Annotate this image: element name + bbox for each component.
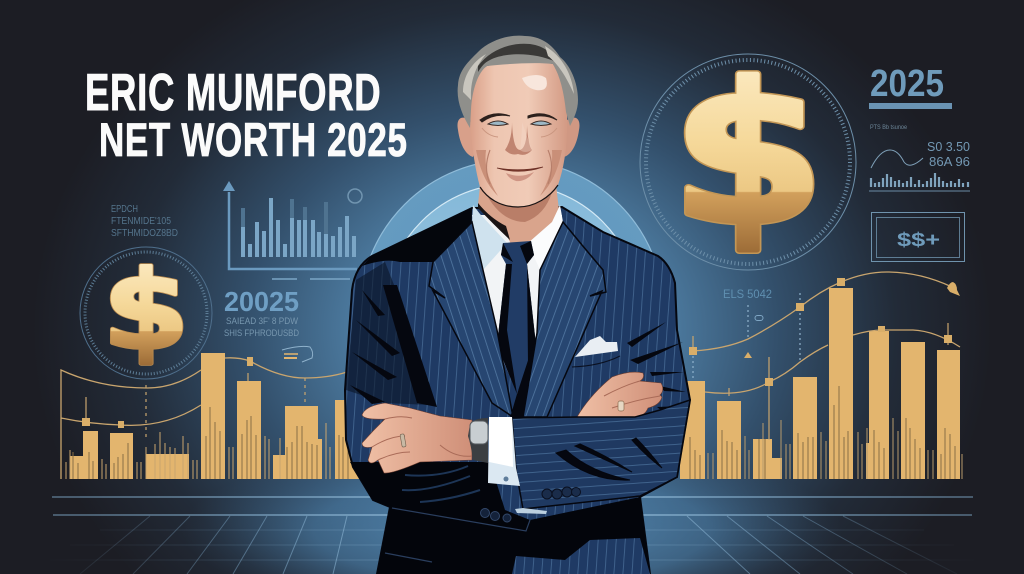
year heading: 2025 — [870, 63, 944, 105]
lower jacket shadow — [350, 462, 650, 574]
portrait: man in suit — [345, 36, 690, 574]
floor grid — [50, 516, 974, 574]
icon: small dollar: $ — [103, 248, 189, 373]
hand detail — [372, 417, 472, 460]
trend lines — [693, 272, 960, 393]
icon: big dollar: $ — [671, 42, 825, 268]
neck shadow — [478, 203, 510, 240]
coin ring — [80, 247, 212, 379]
title: ERIC MUMFORD — [85, 65, 381, 122]
centre shadow — [510, 333, 537, 418]
left arm shade — [346, 262, 430, 405]
small caption: PTS Bb tsunoe — [870, 125, 908, 131]
axis arrow — [223, 181, 235, 191]
small triangle — [744, 352, 752, 358]
panel: right stats — [869, 63, 970, 262]
thin dark ticks — [73, 407, 348, 479]
shoulder shadow — [362, 208, 472, 300]
left arm folds — [350, 290, 400, 404]
lapel shadow — [383, 285, 437, 407]
label: right chart caption: ELS 5042 — [723, 287, 772, 301]
right sleeve — [512, 400, 690, 509]
lower jacket stripes — [512, 538, 650, 574]
wristwatch — [468, 418, 488, 463]
sparkline — [871, 150, 923, 168]
icon: small link — [755, 316, 763, 320]
cheek shadow — [476, 150, 562, 196]
gold bars — [70, 353, 359, 479]
banknote — [872, 212, 964, 262]
neck — [478, 185, 560, 246]
sleeve buttons — [542, 487, 580, 499]
chart bars — [243, 198, 354, 257]
wedding ring — [400, 434, 406, 447]
icon: small dollar: $ — [103, 248, 189, 373]
shirt — [472, 215, 562, 400]
right arm folds — [627, 322, 686, 411]
eye wrinkles — [482, 128, 557, 137]
chart legend lines — [272, 278, 350, 280]
mini baseline — [869, 190, 970, 192]
trend lines — [61, 358, 347, 479]
pocket square — [575, 336, 618, 357]
sleeve under strip — [515, 508, 547, 514]
thin light ticks — [66, 423, 330, 479]
hand: left — [362, 403, 472, 473]
blue bar chart — [223, 181, 362, 279]
icon: big dollar: $ — [671, 42, 825, 268]
nose — [505, 122, 532, 155]
stat caption: SAIEAD 3F' 8 PDW — [226, 316, 298, 326]
title — [85, 65, 407, 166]
horizontal rules — [52, 497, 973, 515]
mini bars — [871, 173, 968, 187]
chart icon — [348, 189, 362, 203]
hair — [458, 36, 578, 128]
pocket flap line — [385, 508, 530, 562]
title: NET WORTH 2025 — [99, 113, 407, 166]
eyebrow left — [480, 114, 510, 122]
jaw shadow — [484, 190, 552, 222]
stat number: 20025 — [224, 286, 299, 317]
end marker — [947, 282, 960, 296]
panel: left coin — [80, 247, 212, 379]
sleeve folds — [556, 438, 662, 480]
face — [470, 62, 567, 207]
jacket buttons — [480, 508, 511, 522]
value two: 86A 96 — [929, 154, 970, 169]
mouth — [497, 167, 543, 171]
lower lip — [506, 172, 534, 181]
panel: left gold bar chart — [61, 353, 359, 479]
year underline — [869, 103, 952, 109]
trend stems — [693, 323, 948, 440]
smile lines — [486, 150, 552, 184]
banknote symbols: $$+ — [897, 230, 940, 251]
cuff button — [504, 476, 508, 482]
hair dark sweep — [478, 44, 556, 72]
cuff highlight — [489, 417, 513, 467]
stat caption: SHIS FPHRODUSBD — [224, 328, 299, 338]
hair light sweep — [463, 46, 574, 100]
ring — [618, 401, 624, 411]
dim bar tops — [243, 199, 326, 234]
lower jacket streaks — [402, 466, 480, 502]
jaw line — [480, 185, 558, 207]
coin ticks — [85, 252, 207, 374]
left lapel — [429, 222, 513, 417]
right lapel — [523, 222, 606, 417]
ear right — [561, 118, 580, 157]
text block: left caption — [111, 204, 178, 239]
eye right — [531, 121, 551, 126]
trend markers — [86, 373, 248, 422]
text block: left caption: SFTHMIDOZ8BD — [111, 228, 178, 239]
trend markers — [689, 278, 952, 386]
eyebrow right — [528, 114, 557, 120]
finger lines — [604, 381, 660, 408]
forehead highlight — [522, 75, 547, 90]
panel: right coin — [640, 42, 856, 270]
pocket line — [572, 356, 620, 367]
text block: left stats — [224, 286, 299, 338]
value one: S0 3.50 — [927, 139, 970, 154]
shirt cuff — [488, 417, 520, 486]
ear left — [458, 118, 476, 157]
gold bars — [680, 288, 960, 479]
coin ticks — [646, 60, 850, 264]
watch face — [470, 421, 488, 444]
nose side — [520, 122, 532, 152]
text block: left caption: FTENMIDE'105 — [111, 216, 171, 227]
hand: right — [577, 372, 663, 417]
thin light ticks — [708, 418, 962, 479]
icon: small stack — [282, 346, 313, 362]
coin ring — [640, 54, 856, 270]
eye left — [488, 121, 508, 126]
text block: left caption: EPDCH — [111, 204, 138, 215]
collar left — [472, 205, 507, 270]
chart axes — [229, 192, 357, 269]
tie shading — [497, 241, 536, 394]
thin dark ticks — [690, 386, 955, 479]
tie — [497, 241, 536, 394]
halo behind portrait — [360, 160, 664, 464]
collar right — [528, 205, 563, 270]
jacket — [345, 207, 690, 574]
panel: right gold bar chart — [680, 272, 962, 479]
stat caption — [224, 316, 299, 338]
